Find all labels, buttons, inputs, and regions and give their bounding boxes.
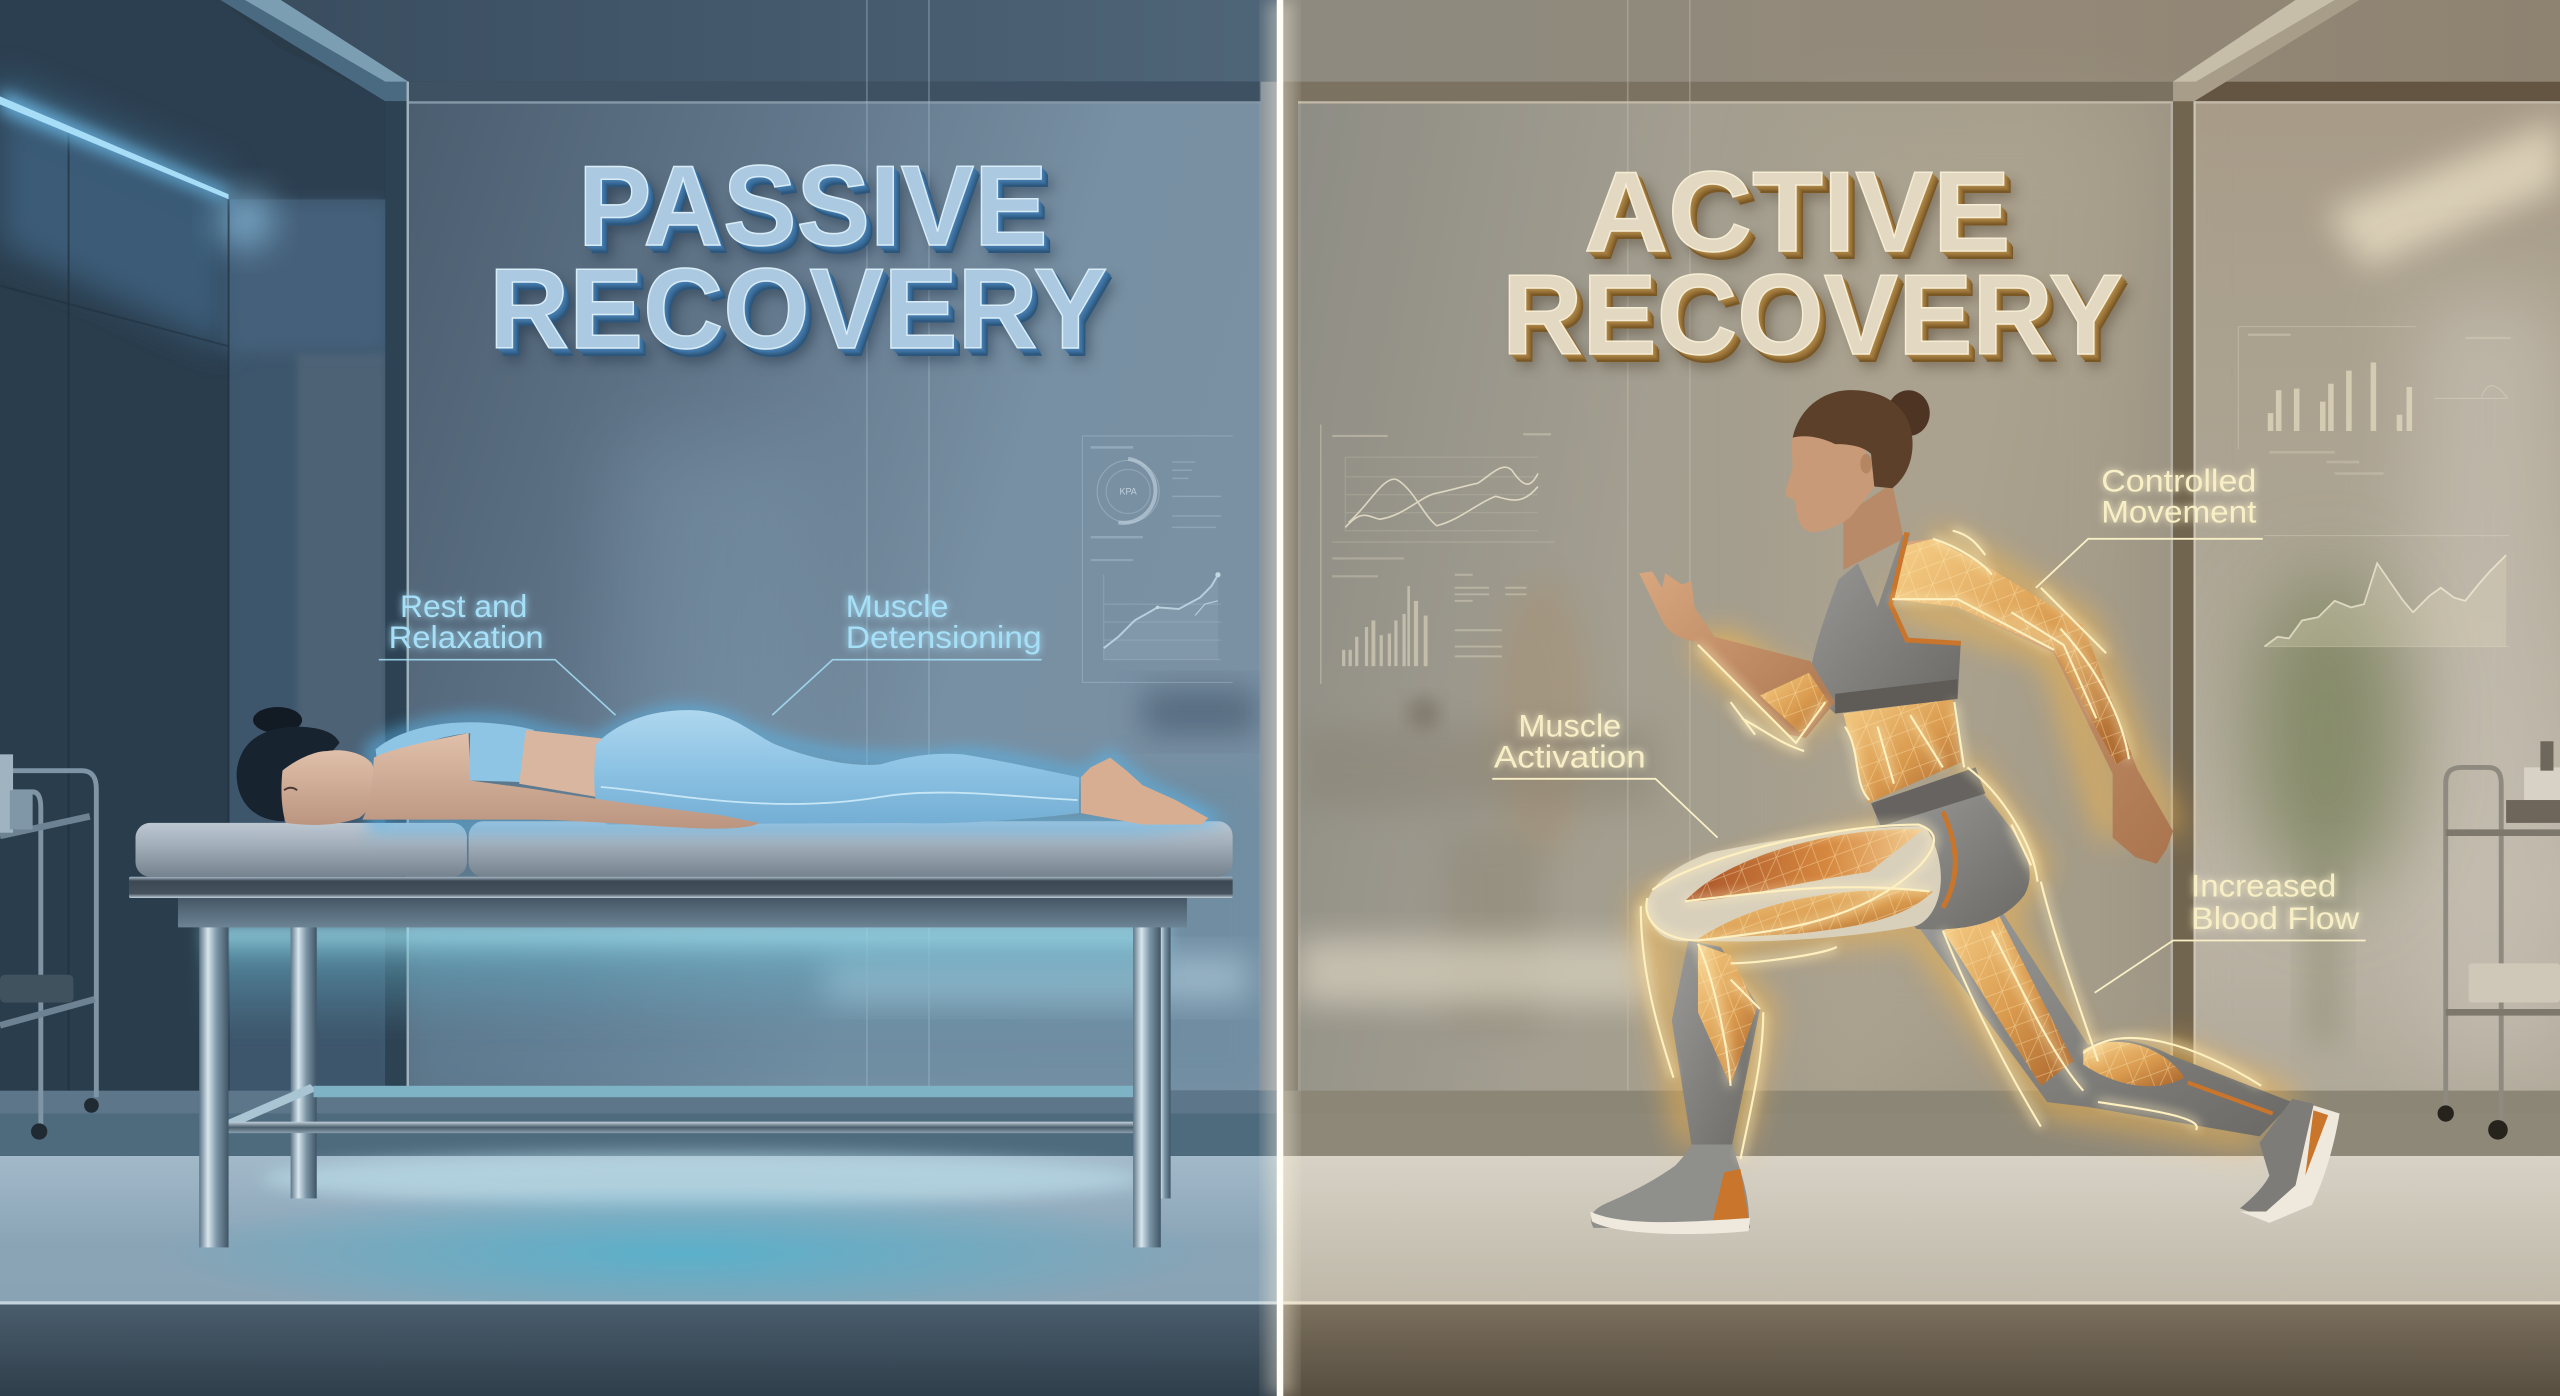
- front thigh: [1647, 826, 1941, 941]
- table legs: [199, 926, 1171, 1247]
- callout: Muscle Activation: Muscle: [1518, 708, 1621, 743]
- figure: passive woman lying down: [237, 707, 1208, 829]
- callout: Controlled Movement: Movement: [2101, 494, 2257, 529]
- panel: passive recovery room background: [0, 0, 1280, 1396]
- callout: Muscle Detensioning: Detensioning: [846, 620, 1042, 655]
- bar chart: [1342, 586, 1428, 666]
- title: ACTIVE RECOVERY: RECOVERY: [1502, 252, 2123, 379]
- rear leg: [1920, 906, 2292, 1136]
- energy outlines: [1641, 531, 2261, 1159]
- callout: Muscle Detensioning: [772, 589, 1042, 715]
- front shin: [1672, 940, 1760, 1145]
- midriff: [1843, 699, 1961, 803]
- donut gauge: KPA: [1120, 487, 1137, 497]
- figure: active woman lunging: [1590, 390, 2340, 1234]
- callout: Increased Blood Flow: [2095, 868, 2366, 993]
- title: ACTIVE RECOVERY: [1502, 149, 2133, 379]
- line chart: [1345, 457, 1538, 531]
- trolley: passive side: [0, 754, 99, 1140]
- chart panel: active glass dashboard right: [2238, 327, 2511, 647]
- centre divider: [1260, 0, 1298, 1396]
- trolley: active side: [2438, 741, 2560, 1140]
- callout: Rest and Relaxation: Rest and: [400, 589, 527, 624]
- cushion pads: [136, 821, 1233, 877]
- glow halo: [1647, 539, 2292, 1145]
- front arm: [1639, 571, 1835, 738]
- area chart: [2264, 536, 2509, 647]
- donut gauge: [1097, 459, 1159, 523]
- panel: active recovery room background: [1280, 0, 2560, 1396]
- rear arm: [1892, 539, 2173, 864]
- title: PASSIVE RECOVERY: PASSIVE: [578, 143, 1048, 270]
- chart panel: passive glass dashboard: [1082, 436, 1233, 682]
- bar chart: [2268, 362, 2412, 431]
- feet: [1081, 758, 1208, 825]
- title: PASSIVE RECOVERY: RECOVERY: [489, 246, 1107, 373]
- callout: Rest and Relaxation: Relaxation: [389, 620, 544, 655]
- midriff: [519, 730, 612, 797]
- title: ACTIVE RECOVERY: ACTIVE: [1584, 149, 2010, 276]
- massage table: [129, 821, 1233, 1247]
- callout: Controlled Movement: [2036, 463, 2263, 588]
- callout: Muscle Activation: Activation: [1494, 739, 1646, 774]
- callout: Controlled Movement: Controlled: [2101, 463, 2256, 498]
- chart panel: active glass dashboard left: [1321, 425, 1554, 684]
- head: [1786, 390, 1930, 570]
- title: PASSIVE RECOVERY: [489, 143, 1118, 373]
- face and shoulder: [281, 750, 375, 825]
- callout: Rest and Relaxation: [379, 589, 616, 715]
- callout: Muscle Activation: [1492, 708, 1718, 838]
- shoes: [1590, 1099, 2340, 1234]
- hair: [237, 707, 340, 821]
- callout: Increased Blood Flow: Increased: [2191, 868, 2336, 903]
- leggings: [594, 710, 1079, 825]
- callout: Increased Blood Flow: Blood Flow: [2191, 901, 2360, 936]
- line chart: [1104, 572, 1221, 660]
- shorts and hip: [1876, 792, 2030, 929]
- sports top: [1810, 532, 1961, 714]
- callout: Muscle Detensioning: Muscle: [846, 589, 949, 624]
- arm: [362, 733, 759, 829]
- crop top: [376, 722, 534, 782]
